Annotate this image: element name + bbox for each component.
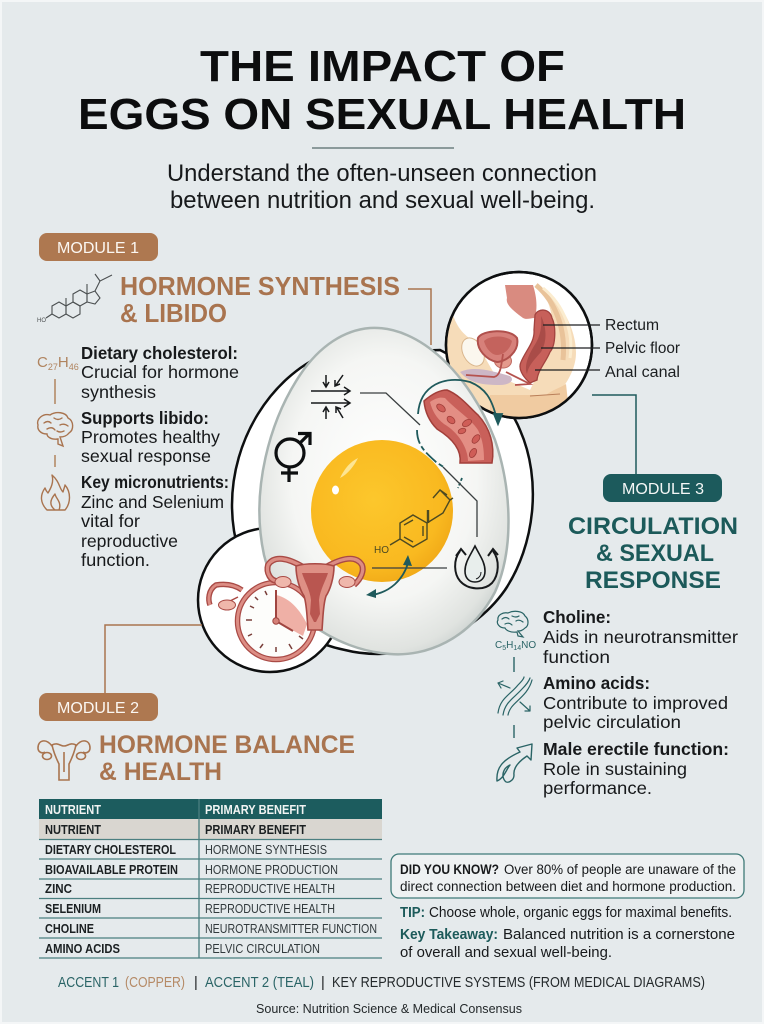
colon <box>505 285 536 319</box>
legend line: ACCENT 2 (TEAL) <box>205 975 314 991</box>
subtitle: Understand the often-unseen connection <box>167 160 597 187</box>
double arrow on egg <box>366 555 412 598</box>
estrogen molecule on yolk <box>374 490 453 556</box>
text block: module 3 benefits: Male erectile function: <box>543 739 729 759</box>
table header: NUTRIENT <box>45 803 101 817</box>
legend line: ACCENT 1 <box>58 975 119 991</box>
text block: module 1 benefits: reproductive <box>81 531 178 551</box>
icon: uterus with clock <box>209 559 363 660</box>
icon: choline formula: 14 <box>513 645 521 652</box>
icon: cholesterol formula: H <box>58 354 69 371</box>
heading: circulation and sexual response: RESPONSE <box>585 567 721 594</box>
estrogen molecule on yolk: HO <box>374 545 389 556</box>
callout: did you know: DID YOU KNOW? <box>400 862 499 877</box>
heading: hormone balance and health <box>99 731 355 786</box>
icon: steroid molecule: HO <box>37 318 46 324</box>
icon: cholesterol formula: 46 <box>69 362 79 372</box>
left ovary and tube <box>209 584 242 610</box>
source: Source: Nutrition Science & Medical Consensus <box>256 1002 522 1016</box>
back shell outline behind egg <box>232 350 533 654</box>
table subheader: NUTRIENT <box>45 823 101 837</box>
egg <box>259 328 509 654</box>
table rows: HORMONE SYNTHESIS <box>205 843 327 857</box>
module 1 badge <box>39 233 158 261</box>
heading: circulation and sexual response <box>568 513 738 594</box>
bladder <box>478 331 517 362</box>
tip: TIP: <box>400 905 425 921</box>
legend line: (COPPER) <box>125 975 185 991</box>
text block: module 1 benefits: sexual response <box>81 446 211 466</box>
table rows: AMINO ACIDS <box>45 942 120 956</box>
module 3 icon connector bottom <box>513 725 515 738</box>
table rows: REPRODUCTIVE HEALTH <box>205 902 335 916</box>
panel: pelvic anatomy circle <box>446 272 592 425</box>
key takeaway: Balanced nutrition is a cornerstone <box>503 927 735 943</box>
callout: did you know: Over 80% of people are unaware of the <box>504 862 736 877</box>
icon: brain teal <box>497 611 528 637</box>
anatomy labels: Pelvic floor <box>605 340 680 357</box>
text block: module 3 benefits: Choline: <box>543 607 611 627</box>
rectum <box>520 310 555 383</box>
icon: brain copper <box>38 413 73 446</box>
module 1 icon connector bottom <box>54 455 56 467</box>
heading: hormone synthesis and libido: & LIBIDO <box>120 298 227 328</box>
key takeaway <box>400 927 735 961</box>
module 2 badge <box>39 693 158 721</box>
icon: cholesterol formula: 27 <box>48 362 58 372</box>
text block: module 3 benefits: Amino acids: <box>543 673 650 693</box>
table rows: DIETARY CHOLESTEROL <box>45 843 176 857</box>
panel: hormone clock circle background <box>198 528 342 672</box>
icon: choline formula: NO <box>521 640 536 651</box>
purple band <box>460 369 512 385</box>
uterus body <box>296 564 334 630</box>
text block: module 3 benefits: Aids in neurotransmitter <box>543 627 738 647</box>
key takeaway: Key Takeaway: <box>400 927 498 943</box>
pubic bone <box>461 337 485 367</box>
module 3 badge: MODULE 3 <box>622 481 704 498</box>
heading: hormone balance and health: & HEALTH <box>99 758 222 786</box>
anatomy labels: Anal canal <box>605 364 680 381</box>
icon: artery <box>424 390 493 463</box>
module 2 badge: MODULE 2 <box>57 700 139 717</box>
icon: flame <box>41 475 70 510</box>
title: EGGS ON SEXUAL HEALTH <box>78 90 686 139</box>
icon: cholesterol formula: C <box>37 354 48 371</box>
table rows <box>45 843 377 956</box>
icon: choline formula: C <box>495 640 502 651</box>
title <box>78 42 686 139</box>
icon: steroid molecule <box>37 274 112 324</box>
table rows: SELENIUM <box>45 902 101 916</box>
text block: module 1 benefits: Zinc and Selenium <box>81 492 224 512</box>
legend line: KEY REPRODUCTIVE SYSTEMS (FROM MEDICAL DIAGRAMS) <box>332 975 705 991</box>
text block: module 1 benefits: vital for <box>81 511 140 531</box>
subtitle: between nutrition and sexual well-being. <box>170 187 595 214</box>
table rows: BIOAVAILABLE PROTEIN <box>45 863 178 877</box>
table subheader: PRIMARY BENEFIT <box>205 823 306 837</box>
legend line: | <box>194 975 198 991</box>
text block: module 1 benefits: synthesis <box>81 382 156 402</box>
heading: hormone balance and health: HORMONE BALANCE <box>99 731 355 759</box>
text block: module 1 benefits: Key micronutrients: <box>81 472 229 492</box>
module 1 badge: MODULE 1 <box>57 240 139 257</box>
callout: did you know: direct connection between diet and hormone production. <box>400 879 736 894</box>
icon: choline formula: 5 <box>502 645 506 652</box>
icon: circulation arrows <box>498 677 532 715</box>
module 1 icon connector top <box>54 379 56 404</box>
uterus tubes <box>267 559 363 585</box>
anatomy labels <box>605 317 680 381</box>
table: nutrients and benefits <box>39 799 382 958</box>
connector: module 1 to egg <box>408 289 431 345</box>
table subheader <box>39 819 382 839</box>
table rows: REPRODUCTIVE HEALTH <box>205 882 335 896</box>
clock <box>238 582 314 660</box>
subtitle <box>167 160 597 214</box>
text block: module 1 benefits: Dietary cholesterol: <box>81 343 238 363</box>
text block: module 3 benefits: Contribute to improved <box>543 693 728 713</box>
connector lines on egg <box>360 393 477 568</box>
icon: compression arrows <box>311 375 350 419</box>
icon: upward curved arrow <box>497 744 532 782</box>
text block: module 1 benefits: function. <box>81 550 150 570</box>
text block: module 3 benefits: performance. <box>543 778 652 798</box>
urethra <box>466 354 530 385</box>
text block: module 1 benefits <box>81 343 239 570</box>
table rows: CHOLINE <box>45 922 94 936</box>
anatomy labels: Rectum <box>605 317 659 334</box>
text block: module 1 benefits: Supports libido: <box>81 408 209 428</box>
callout: did you know <box>391 854 744 898</box>
anatomy leader lines <box>535 325 600 370</box>
heading: hormone synthesis and libido <box>120 271 400 328</box>
text block: module 1 benefits: Promotes healthy <box>81 427 220 447</box>
table rows: ZINC <box>45 882 72 896</box>
teal arc arrows around artery <box>417 380 502 488</box>
module 3 icon connector top <box>513 657 515 672</box>
icon: gender symbol <box>276 434 310 482</box>
icon: choline formula: H <box>506 640 513 651</box>
heading: circulation and sexual response: & SEXUAL <box>596 540 714 567</box>
heading: circulation and sexual response: CIRCULATION <box>568 513 738 540</box>
icon: water drop cycle <box>455 546 498 588</box>
text block: module 3 benefits <box>543 607 738 798</box>
text block: module 3 benefits: function <box>543 647 610 667</box>
connector: module 2 to circle <box>105 625 202 693</box>
text block: module 3 benefits: pelvic circulation <box>543 712 681 732</box>
module 3 badge <box>603 474 722 502</box>
table rows: PELVIC CIRCULATION <box>205 942 320 956</box>
prostate <box>494 357 512 368</box>
legend line <box>58 975 705 991</box>
connector: anatomy to module 3 <box>592 395 636 474</box>
body tissue <box>447 296 576 417</box>
text block: module 1 benefits: Crucial for hormone <box>81 362 239 382</box>
icon: uterus copper <box>38 741 90 780</box>
table header <box>39 799 382 819</box>
tip: Choose whole, organic eggs for maximal benefits. <box>429 905 732 921</box>
key takeaway: of overall and sexual well-being. <box>400 945 612 961</box>
text block: module 3 benefits: Role in sustaining <box>543 759 687 779</box>
table rows: NEUROTRANSMITTER FUNCTION <box>205 922 377 936</box>
table header: PRIMARY BENEFIT <box>205 803 306 817</box>
title: THE IMPACT OF <box>200 42 565 91</box>
legend line: | <box>321 975 325 991</box>
egg yolk <box>311 440 453 582</box>
table rows: HORMONE PRODUCTION <box>205 863 338 877</box>
heading: hormone synthesis and libido: HORMONE SYNTHESIS <box>120 271 400 301</box>
